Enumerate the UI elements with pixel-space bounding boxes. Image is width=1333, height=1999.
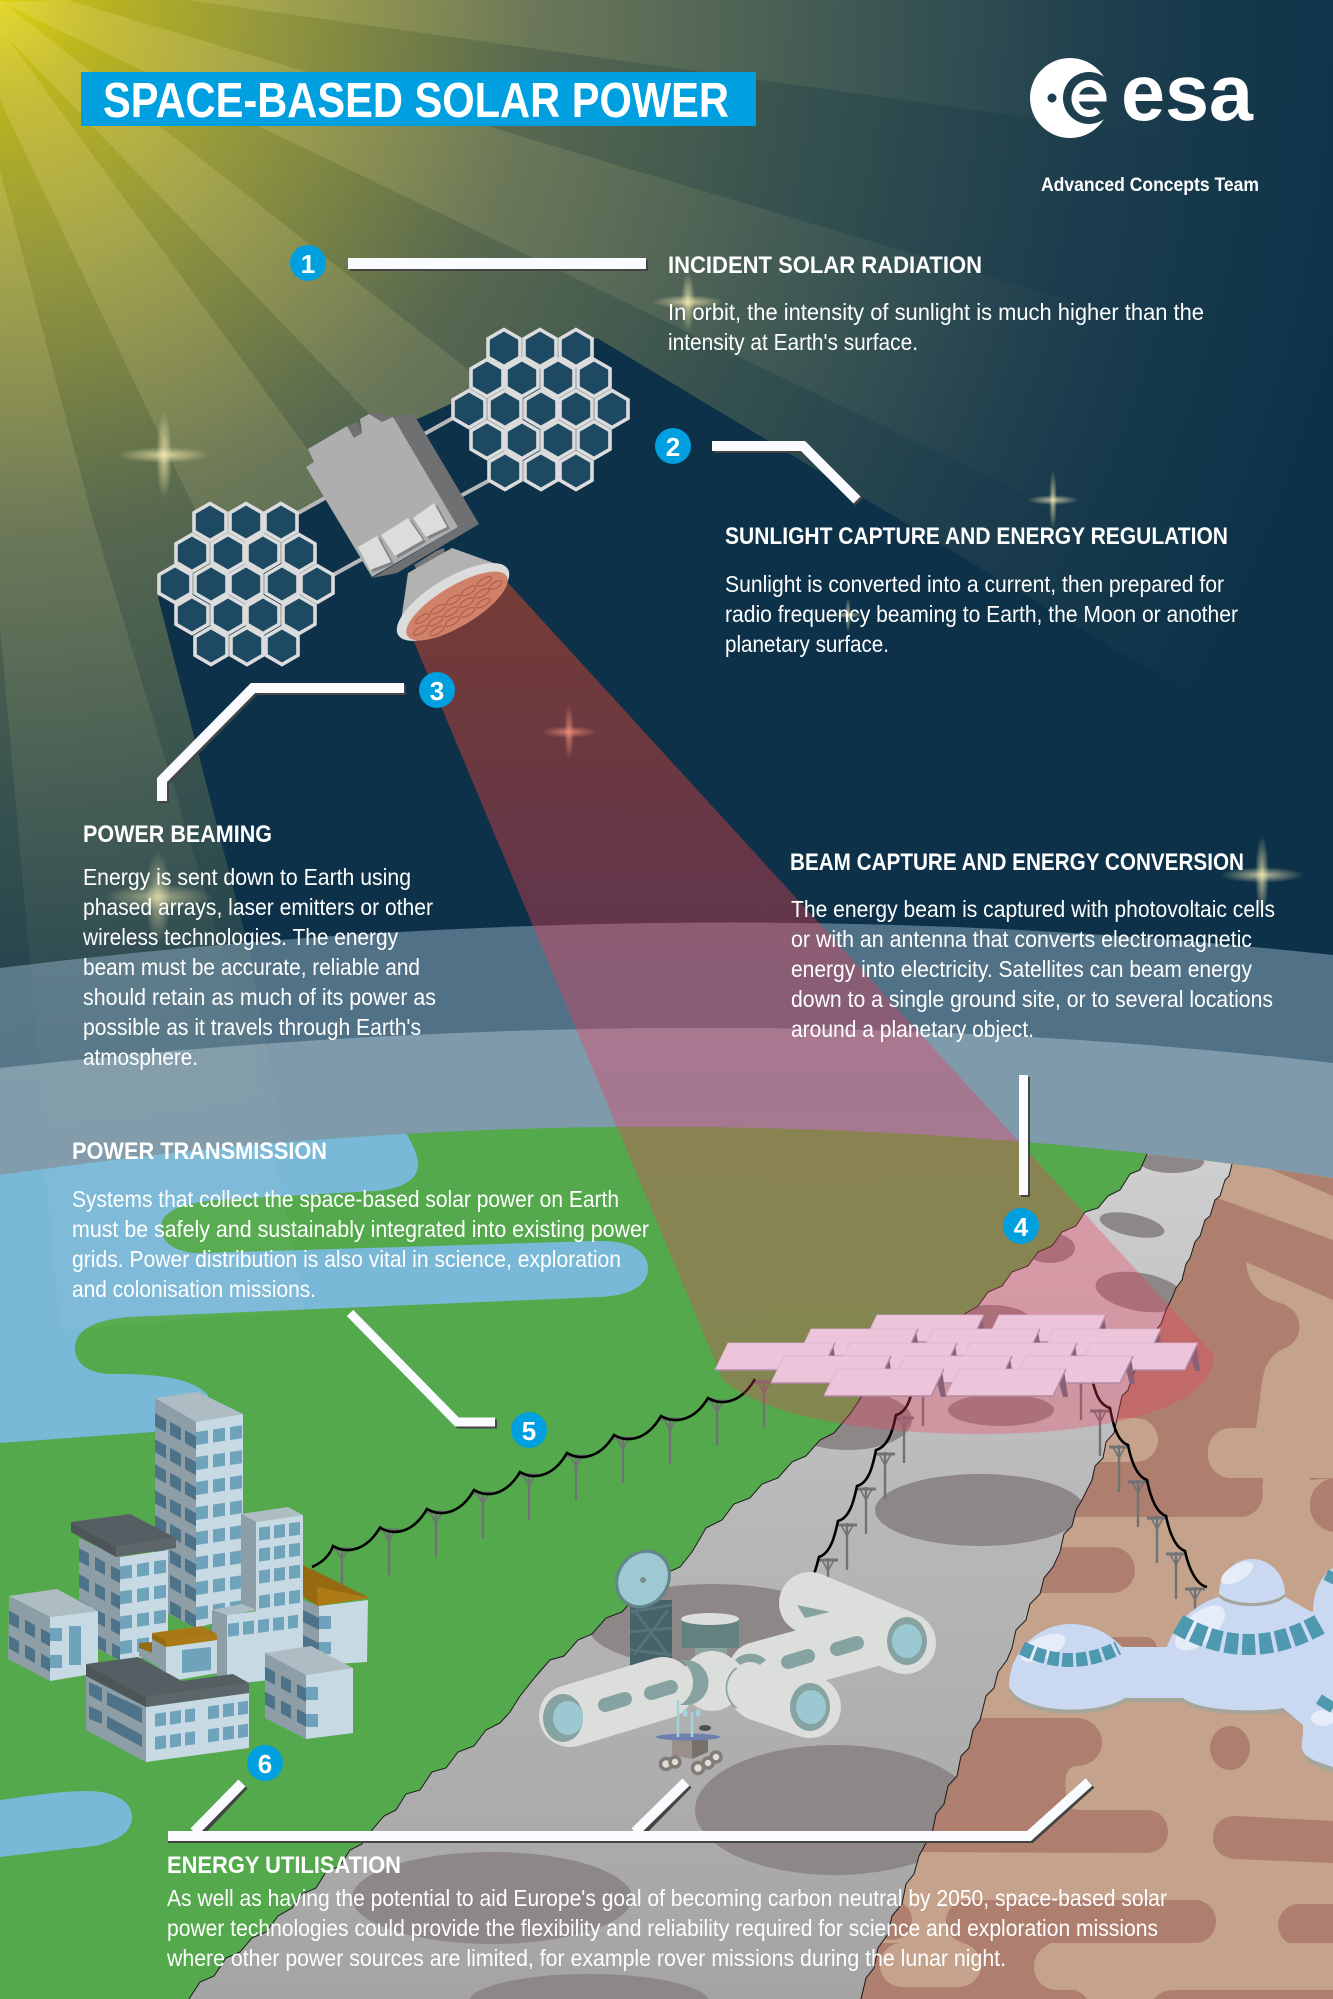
ESA logo	[1030, 48, 1253, 138]
badge 4: 4	[1014, 1212, 1029, 1242]
centre orange-roofed building	[139, 1642, 152, 1653]
body 2	[725, 571, 1238, 657]
pointer 6	[168, 1782, 1091, 1838]
lunar strip	[188, 1154, 1332, 1999]
front building	[86, 1676, 146, 1762]
badge 6	[247, 1745, 283, 1781]
body 1	[668, 299, 1204, 355]
solar panel array	[715, 1315, 1200, 1397]
tower	[155, 1392, 243, 1422]
body 5	[72, 1186, 649, 1302]
heading 5: POWER TRANSMISSION	[72, 1138, 327, 1165]
badge 1: 1	[301, 249, 315, 279]
body 4: down to a single ground site, or to several locations	[791, 986, 1273, 1012]
transmitter dish	[386, 548, 520, 656]
power lines	[312, 1373, 1207, 1634]
badge 6: 6	[258, 1749, 272, 1779]
ray glow over water	[45, 1130, 305, 1330]
body 4: energy into electricity. Satellites can beam energy	[791, 956, 1252, 982]
stars	[103, 272, 1304, 943]
team credit: Advanced Concepts Team	[1041, 175, 1259, 196]
planet surface	[0, 1050, 1333, 1999]
step 1: incident solar radiation	[290, 245, 1204, 355]
support arms	[298, 418, 490, 575]
body 5: grids. Power distribution is also vital in science, exploration	[72, 1246, 621, 1272]
body 2: radio frequency beaming to Earth, the Moon or another	[725, 601, 1238, 627]
comms tower and dish	[606, 1541, 680, 1666]
pointer 4	[1019, 1075, 1030, 1197]
right tall building	[241, 1507, 303, 1522]
habitat domes	[1009, 1557, 1333, 1772]
satellite body	[306, 413, 479, 578]
badge 4	[1003, 1208, 1039, 1244]
right small building	[265, 1646, 353, 1675]
body 2: Sunlight is converted into a current, then prepared for	[725, 571, 1224, 597]
body 4: around a planetary object.	[791, 1016, 1034, 1042]
badge 3	[419, 672, 455, 708]
body 6: As well as having the potential to aid Europe's goal of becoming carbon neutral by 2050, space-based solar	[167, 1885, 1167, 1911]
pointer 5	[350, 1313, 497, 1424]
body 4	[791, 896, 1275, 1042]
body 3: beam must be accurate, reliable and	[83, 954, 420, 980]
power beam	[412, 572, 1214, 1434]
pointer 3	[162, 688, 406, 803]
body 3: phased arrays, laser emitters or other	[83, 894, 433, 920]
step 4: beam capture	[790, 849, 1275, 1244]
pointer 1	[348, 258, 648, 271]
heading 4: BEAM CAPTURE AND ENERGY CONVERSION	[790, 849, 1244, 876]
body 4: or with an antenna that converts electromagnetic	[791, 926, 1252, 952]
body 5: must be safely and sustainably integrated into existing power	[72, 1216, 649, 1242]
body 6: where other power sources are limited, for example rover missions during the lunar night.	[166, 1945, 1006, 1971]
body 6: power technologies could provide the flexibility and reliability required for science and exploration missions	[167, 1915, 1158, 1941]
martian ground	[850, 1100, 1333, 1999]
ESA logo: esa	[1121, 48, 1253, 137]
cylinder module	[681, 1613, 739, 1657]
heading 2: SUNLIGHT CAPTURE AND ENERGY REGULATION	[725, 523, 1228, 550]
badge 1	[290, 245, 326, 281]
pointer 2	[712, 446, 859, 502]
body 2: planetary surface.	[725, 631, 889, 657]
body 1: intensity at Earth's surface.	[668, 329, 918, 355]
badge 5: 5	[522, 1416, 536, 1446]
atmosphere layers	[0, 922, 1333, 1999]
heading 6: ENERGY UTILISATION	[167, 1852, 401, 1879]
badge 5	[511, 1412, 547, 1448]
lunar base	[543, 1541, 927, 1774]
body 3	[82, 864, 436, 1070]
body 6	[166, 1885, 1167, 1971]
left small building	[9, 1589, 98, 1617]
badge 2	[655, 428, 691, 464]
body 3: Energy is sent down to Earth using	[83, 864, 411, 890]
body 3: wireless technologies. The energy	[82, 924, 398, 950]
step 5: power transmission	[72, 1138, 649, 1448]
left hexagonal solar array	[159, 504, 333, 664]
body 3: possible as it travels through Earth's	[83, 1014, 421, 1040]
satellite	[159, 330, 628, 664]
badge 3: 3	[430, 676, 444, 706]
body 1: In orbit, the intensity of sunlight is much higher than the	[668, 299, 1204, 325]
step 3: power beaming	[82, 672, 455, 1070]
body 3: atmosphere.	[83, 1044, 198, 1070]
step 2: sunlight capture	[655, 428, 1238, 657]
right hexagonal solar array	[453, 330, 628, 490]
body 5: and colonisation missions.	[72, 1276, 316, 1302]
water	[0, 1100, 648, 1857]
body 3: should retain as much of its power as	[83, 984, 436, 1010]
body 5: Systems that collect the space-based solar power on Earth	[72, 1186, 619, 1212]
title bar: SPACE-BASED SOLAR POWER	[103, 74, 729, 128]
left building	[79, 1538, 120, 1660]
city buildings	[8, 1392, 370, 1762]
step 6: energy utilisation	[166, 1745, 1167, 1971]
badge 2: 2	[666, 432, 680, 462]
body 4: The energy beam is captured with photovoltaic cells	[791, 896, 1275, 922]
rover	[656, 1700, 721, 1774]
heading 1: INCIDENT SOLAR RADIATION	[668, 252, 982, 279]
heading 3: POWER BEAMING	[83, 821, 272, 848]
